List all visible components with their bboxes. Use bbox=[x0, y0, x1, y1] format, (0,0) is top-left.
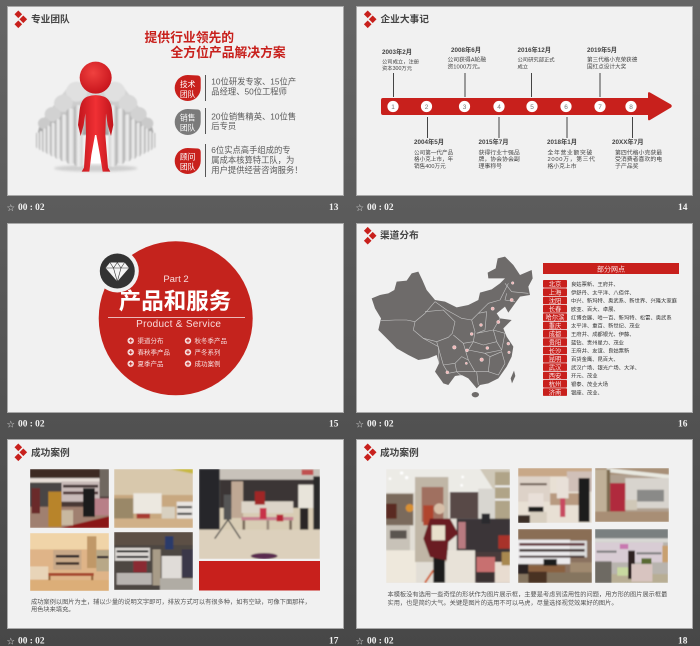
icon: logo diamonds bbox=[14, 443, 27, 461]
footer: slide 14: ☆ bbox=[356, 203, 364, 214]
timeline nodes: 2 bbox=[425, 104, 429, 111]
event: 2019 bbox=[587, 45, 638, 70]
table: outlets: 武汉广场、银光广场、大洋、 bbox=[571, 363, 640, 371]
photo: model in store bbox=[386, 469, 510, 583]
timeline nodes: 6 bbox=[564, 104, 568, 111]
caption: 用色块来填充。 bbox=[31, 606, 75, 614]
text: sales team bbox=[205, 108, 296, 134]
table: outlets bbox=[543, 279, 678, 396]
table: outlets: 太平洋、重百、新世纪、茂业 bbox=[571, 322, 640, 330]
event: 2008: 2008年6月 bbox=[451, 45, 481, 54]
text: sales team: 20位销售精英、10位售 bbox=[211, 112, 296, 122]
red block bbox=[199, 561, 320, 590]
photo: store interior 2 bbox=[114, 469, 193, 528]
event: 2003: 公司成立，注册 bbox=[382, 58, 420, 66]
badge: tech team bbox=[175, 75, 201, 101]
timeline nodes: 3 bbox=[463, 104, 467, 111]
table: outlets: 西安 bbox=[549, 371, 561, 380]
footer: slide 15: ☆ bbox=[6, 420, 15, 430]
photo: boutique counter bbox=[595, 529, 668, 583]
event: 2018: 格小克上市 bbox=[548, 162, 577, 170]
event: 20XX: 第四代格小克获最 bbox=[615, 148, 662, 156]
table: outlets: 伊舒丹、太平洋、八佰伴、 bbox=[571, 288, 635, 296]
footer: slide 13: ☆ bbox=[6, 203, 15, 214]
table: outlets: 济南 bbox=[549, 388, 561, 396]
event: 2015 bbox=[478, 137, 520, 170]
heading: section title: 产品和服务 bbox=[119, 289, 231, 314]
heading: team: 专业团队 bbox=[31, 12, 70, 26]
panel: slide 17 case studies bbox=[8, 440, 344, 628]
table: outlets: 王府井、友谊、良姑票新 bbox=[571, 347, 630, 355]
footer: slide 16 bbox=[356, 420, 688, 430]
icon: logo diamonds bbox=[364, 10, 377, 28]
footer: slide 15 bbox=[6, 420, 339, 430]
footer: slide 14: 14 bbox=[678, 203, 688, 213]
icon: logo diamonds bbox=[364, 443, 377, 461]
photo: store interior 4 bbox=[114, 532, 193, 590]
timeline nodes: 5 bbox=[530, 104, 534, 111]
event: 2018: 全年营业额突破 bbox=[548, 148, 593, 156]
table header bbox=[543, 263, 679, 274]
panel: slide 15 section cover bbox=[8, 224, 344, 412]
list: section items: 秋冬季产品 bbox=[194, 336, 227, 345]
table: outlets: 欧亚、百大、卓展、 bbox=[571, 305, 619, 313]
badge: consultant team: 团队 bbox=[180, 162, 196, 172]
event: 2018: 2018年1月 bbox=[547, 137, 577, 146]
arrow: timeline bar bbox=[381, 92, 672, 120]
event: 2019: 国红点设计大奖 bbox=[587, 62, 627, 70]
text: consultant team: 属成本核算特工队，为 bbox=[211, 155, 294, 165]
table: outlets: 百货金鹰、昆百大、 bbox=[571, 355, 619, 363]
heading: solution title bbox=[144, 30, 286, 60]
text: consultant team: 6位实点高手组成的专 bbox=[211, 145, 291, 155]
list: section items: 渠道分布 bbox=[138, 336, 164, 345]
table: outlets: 红博会展、哈一百、新玛特、松雷、奥武系 bbox=[571, 313, 672, 321]
table: outlets: 贵阳 bbox=[549, 338, 561, 346]
heading: channels: 渠道分布 bbox=[380, 228, 419, 242]
event: 2016: 公司研究部正式 bbox=[518, 56, 555, 64]
list: section items: 严冬系列 bbox=[194, 348, 220, 356]
table: outlets: 蓝钻、贵州星力、茂业 bbox=[571, 338, 624, 346]
footer: slide 18 bbox=[356, 636, 688, 646]
footer: slide 14: 00 : 02 bbox=[367, 203, 394, 213]
footer: slide 15: 00 : 02 bbox=[18, 420, 45, 430]
photo: shop front bbox=[595, 468, 669, 522]
timeline nodes: 7 bbox=[598, 104, 602, 111]
event: 2004: 格小克上市，年 bbox=[414, 155, 454, 163]
table: outlets: 北京 bbox=[549, 279, 561, 288]
table: outlets: 重庆 bbox=[549, 321, 562, 330]
text: sales team: 后专员 bbox=[211, 121, 236, 131]
event: 2019: 2019年5月 bbox=[587, 45, 617, 54]
illustration: red figure leading white figures bbox=[36, 62, 155, 172]
heading: solution title: 全方位产品解决方案 bbox=[170, 45, 286, 60]
badge: tech team: 技术 bbox=[180, 79, 196, 89]
caption bbox=[31, 598, 311, 614]
event: 2003: 资本300万元 bbox=[382, 64, 413, 72]
panel: slide 13 team bbox=[8, 6, 344, 196]
timeline connectors bbox=[394, 73, 632, 138]
event: 2004: 销售400万元 bbox=[414, 162, 446, 170]
heading: cases: 成功案例 bbox=[380, 446, 419, 459]
event: 2018 bbox=[547, 137, 596, 170]
timeline nodes: 8 bbox=[629, 104, 633, 111]
text: consultant team: 用户提供经营咨询服务！ bbox=[211, 165, 303, 175]
list: section items: 成功案例 bbox=[194, 359, 220, 368]
event: 2008 bbox=[448, 45, 486, 70]
table: outlets: 杭州 bbox=[549, 379, 561, 388]
icon: logo diamonds bbox=[14, 10, 27, 28]
event: 20XX: 20XX年7月 bbox=[612, 137, 644, 146]
table: outlets: 沈阳 bbox=[549, 296, 561, 305]
table: outlets: 昆明 bbox=[549, 355, 561, 363]
event: 2008: 资1000万元。 bbox=[448, 62, 484, 70]
table: outlets: 银座、茂业、 bbox=[571, 388, 603, 396]
event: 2004: 2004年5月 bbox=[414, 137, 444, 146]
list: section items bbox=[128, 336, 227, 368]
photo: fitting shoes bbox=[518, 468, 592, 523]
caption: 成功案例以图片为主，辅以少量的说明文字即可，排放方式可以有很多种，如有空缺，可像下面那样， bbox=[31, 598, 311, 606]
heading: milestones: 企业大事记 bbox=[380, 12, 429, 26]
footer: slide 13: 00 : 02 bbox=[18, 203, 45, 213]
table: outlets: 长春 bbox=[549, 304, 562, 313]
text: consultant team bbox=[205, 144, 303, 177]
event: 2004: 公司第一代产品 bbox=[414, 148, 454, 156]
table: outlets: 成都 bbox=[549, 329, 562, 338]
footer: slide 17 bbox=[6, 636, 339, 646]
footer: slide 13: 13 bbox=[329, 203, 339, 213]
footer: slide 15: 15 bbox=[329, 420, 339, 430]
event: 2015: 牌，协会协会副 bbox=[478, 155, 520, 163]
table header: 部分网点 bbox=[597, 264, 625, 274]
table: outlets: 银泰、茂业大场 bbox=[571, 380, 608, 388]
caption: 本模板没有选用一些奇怪的形状作为图片展示框，主要是考虑到适用性的问题，用方形的图片展示框最 bbox=[388, 590, 667, 598]
timeline nodes bbox=[387, 101, 637, 112]
event: 20XX bbox=[612, 137, 662, 170]
event: 20XX: 受消费者喜欢的电 bbox=[615, 155, 662, 163]
table: outlets: 长沙 bbox=[549, 346, 562, 355]
icon: logo diamonds bbox=[364, 227, 377, 245]
event: 2015: 获得行业十强品 bbox=[478, 148, 520, 156]
photo: crowd at display bbox=[199, 469, 320, 559]
text: tech team bbox=[205, 75, 296, 101]
footer: slide 14 bbox=[356, 203, 688, 214]
event: 2003: 2003年2月 bbox=[382, 47, 412, 56]
footer: slide 16: 00 : 02 bbox=[367, 420, 394, 430]
panel: slide 14 timeline bbox=[356, 6, 692, 196]
panel: slide 16 channels bbox=[356, 224, 692, 412]
event: 2016: 2016年12月 bbox=[518, 45, 551, 54]
heading: solution title: 提供行业领先的 bbox=[144, 30, 234, 45]
event: 2004 bbox=[414, 137, 454, 170]
text: tech team: 10位研发专家、15位产 bbox=[211, 76, 296, 86]
badge: consultant team: 顾问 bbox=[180, 152, 196, 162]
event: 2018: 2000万，第三代 bbox=[548, 155, 596, 163]
table: outlets: 武汉 bbox=[549, 362, 562, 372]
table: outlets: 哈尔滨 bbox=[546, 312, 565, 322]
timeline nodes: 1 bbox=[391, 104, 395, 111]
table: outlets: 良姑票新、王府井、 bbox=[571, 280, 619, 288]
table: outlets: 王府井、成都银光、伊藤、 bbox=[571, 330, 635, 338]
red circle bbox=[99, 241, 253, 395]
photo: store interior 1 bbox=[30, 469, 109, 528]
event: 20XX: 子产品奖 bbox=[615, 162, 639, 170]
event: 2016 bbox=[518, 45, 555, 70]
panel: slide 18 case studies bbox=[356, 440, 692, 628]
table: outlets: 中兴、新玛特、奥武系、新世界、兴隆大家庭 bbox=[571, 297, 678, 305]
photo: shoe shelves bbox=[518, 529, 592, 583]
badge: consultant team bbox=[175, 148, 201, 174]
text: tech team: 品经理、50位工程师 bbox=[211, 86, 287, 96]
heading: cases: 成功案例 bbox=[31, 446, 70, 459]
list: section items: 春秋季产品 bbox=[138, 348, 170, 356]
footer: slide 13 bbox=[6, 203, 339, 214]
table: outlets: 上海 bbox=[549, 288, 562, 296]
event: 2016: 成立 bbox=[518, 62, 528, 70]
badge: sales team bbox=[175, 109, 201, 135]
map: China bbox=[372, 257, 533, 397]
event: 2008: 公司获得A轮融 bbox=[448, 56, 486, 64]
event: 2015: 2015年7月 bbox=[478, 137, 509, 146]
event: 2015: 理事称号 bbox=[478, 162, 502, 170]
caption bbox=[388, 590, 667, 607]
badge: tech team: 团队 bbox=[180, 90, 196, 99]
list: section items: 夏季产品 bbox=[138, 359, 164, 368]
subtitle: Product & Service bbox=[136, 319, 221, 330]
footer: slide 16: 16 bbox=[678, 420, 688, 430]
icon: diamond badge bbox=[96, 250, 139, 292]
timeline nodes: 4 bbox=[497, 104, 501, 111]
label: part: Part 2 bbox=[163, 274, 189, 285]
event: 2003 bbox=[382, 47, 420, 72]
badge: sales team: 销售 bbox=[180, 112, 196, 122]
table: outlets: 开元、茂业 bbox=[571, 372, 598, 380]
footer: slide 16: ☆ bbox=[356, 420, 364, 430]
caption: 实用，也是简约大气。关键是图片的选用不可以马虎，尽量选择视觉效果好的图片。 bbox=[388, 599, 618, 607]
event: 2019: 第三代格小克荣获德 bbox=[587, 56, 638, 64]
badge: sales team: 团队 bbox=[180, 124, 196, 132]
photo: store interior 3 bbox=[30, 533, 109, 591]
